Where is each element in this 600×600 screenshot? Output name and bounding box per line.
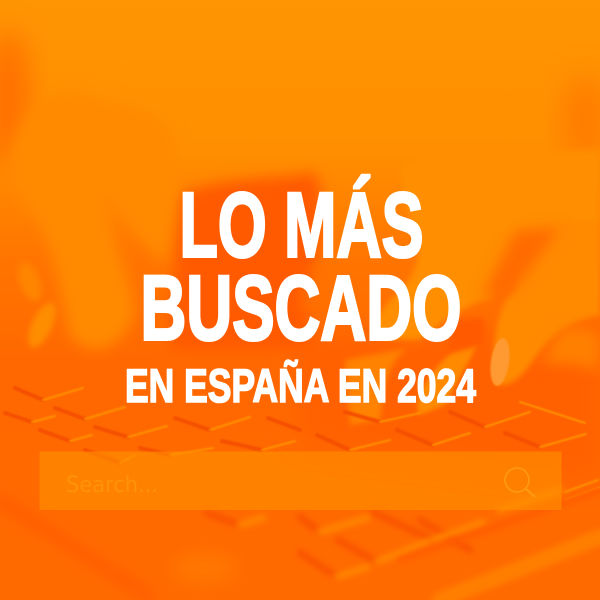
search bar <box>40 452 562 510</box>
search bar panel <box>40 452 562 510</box>
right hand <box>345 150 600 425</box>
title line: BUSCADO: BUSCADO <box>140 258 462 360</box>
dark edges and shadows behind the hands <box>0 30 600 480</box>
subtitle: EN ESPAÑA EN 2024: EN ESPAÑA EN 2024 <box>125 359 476 412</box>
keyboard keys <box>0 388 600 600</box>
icon: magnifying glass <box>505 468 535 497</box>
search placeholder text: Search... <box>66 473 158 498</box>
title line: LO MÁS: LO MÁS <box>180 174 424 276</box>
left hand <box>8 91 176 351</box>
title <box>125 174 476 412</box>
